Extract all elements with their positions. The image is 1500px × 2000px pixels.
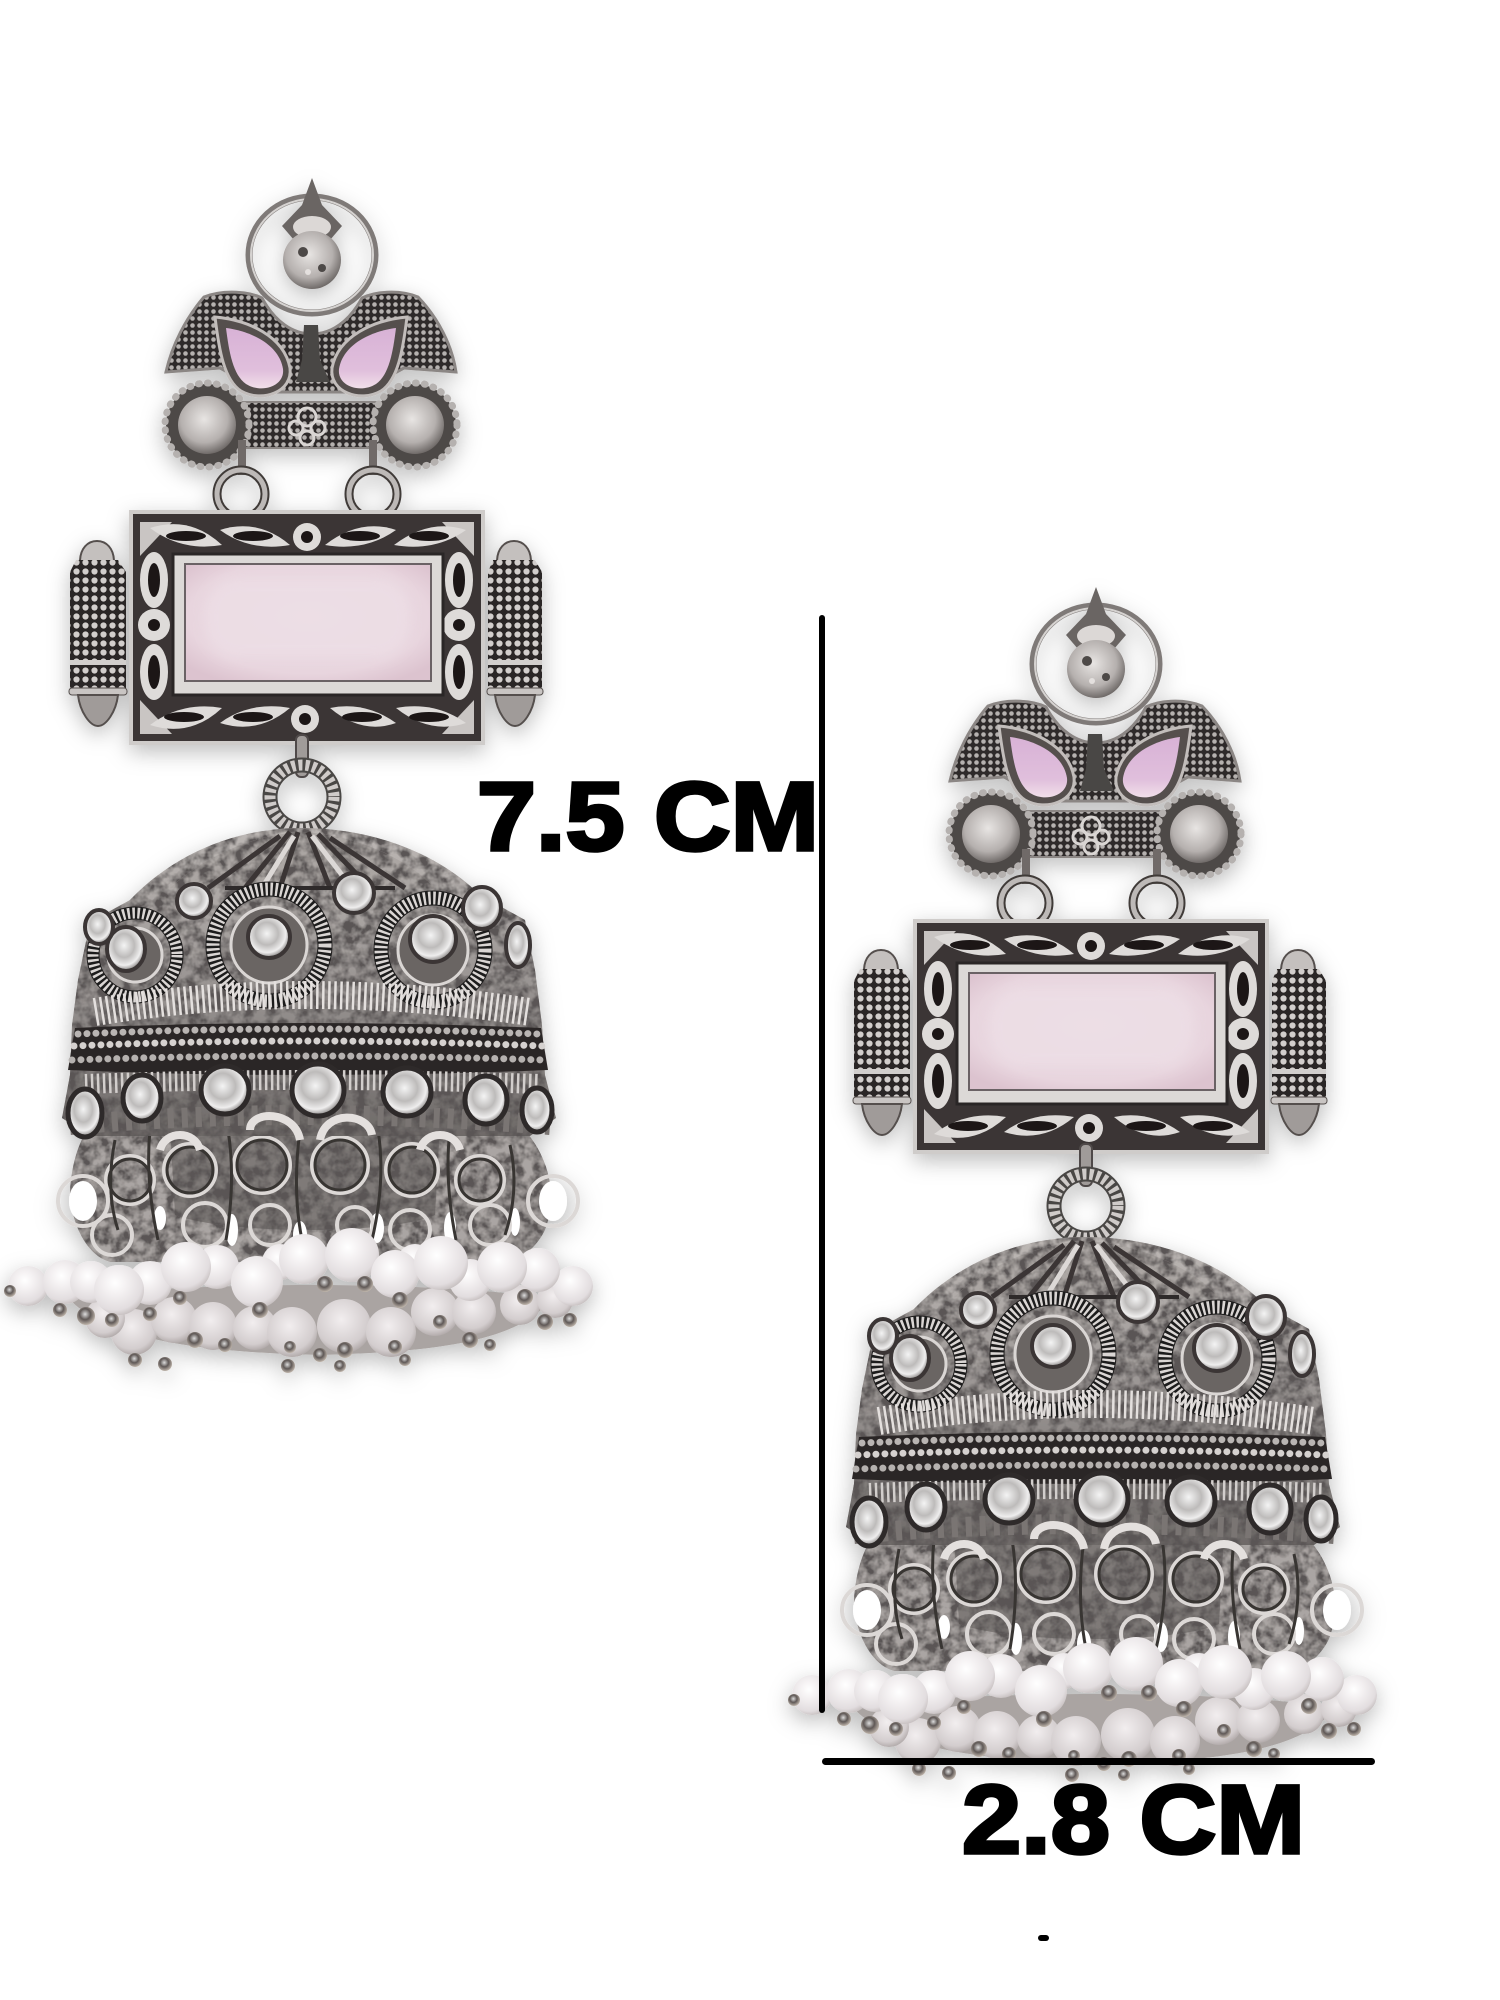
dome ribs xyxy=(170,832,435,888)
hanging loop xyxy=(270,735,334,829)
engraved rectangular frame xyxy=(131,512,483,743)
left side cylinder xyxy=(69,541,127,726)
height label: 7.5 CM xyxy=(477,762,819,871)
shaded backing xyxy=(70,1285,550,1355)
silver bead tips xyxy=(4,1276,577,1373)
width measure line xyxy=(822,1758,1375,1765)
beaded band xyxy=(68,1023,548,1075)
lower pearls xyxy=(85,1282,573,1357)
lower bar with two studs xyxy=(165,383,457,475)
left earring xyxy=(4,178,593,1373)
lower crystal stones xyxy=(68,1064,552,1137)
small dot mark xyxy=(1038,1935,1049,1941)
upper pearls xyxy=(8,1228,593,1315)
upper crystal stones xyxy=(85,873,530,971)
stud ring with ball xyxy=(249,178,375,313)
engraved swirl medallions xyxy=(93,889,485,1002)
right side cylinder xyxy=(487,541,543,726)
ribbed fans above band xyxy=(95,995,530,1012)
connecting loops xyxy=(217,470,397,518)
crescent with pink teardrops xyxy=(166,292,456,396)
right earring xyxy=(788,587,1377,1782)
jhumka hanging chains xyxy=(58,1125,578,1262)
bright connector rings xyxy=(160,1116,460,1150)
jhumka dome xyxy=(62,828,556,1150)
height measure line xyxy=(819,615,825,1713)
width label: 2.8 CM xyxy=(962,1765,1305,1874)
pearl cluster xyxy=(4,1228,593,1373)
ribbed fans below band xyxy=(85,1080,540,1084)
pink rectangular stone xyxy=(173,554,443,695)
